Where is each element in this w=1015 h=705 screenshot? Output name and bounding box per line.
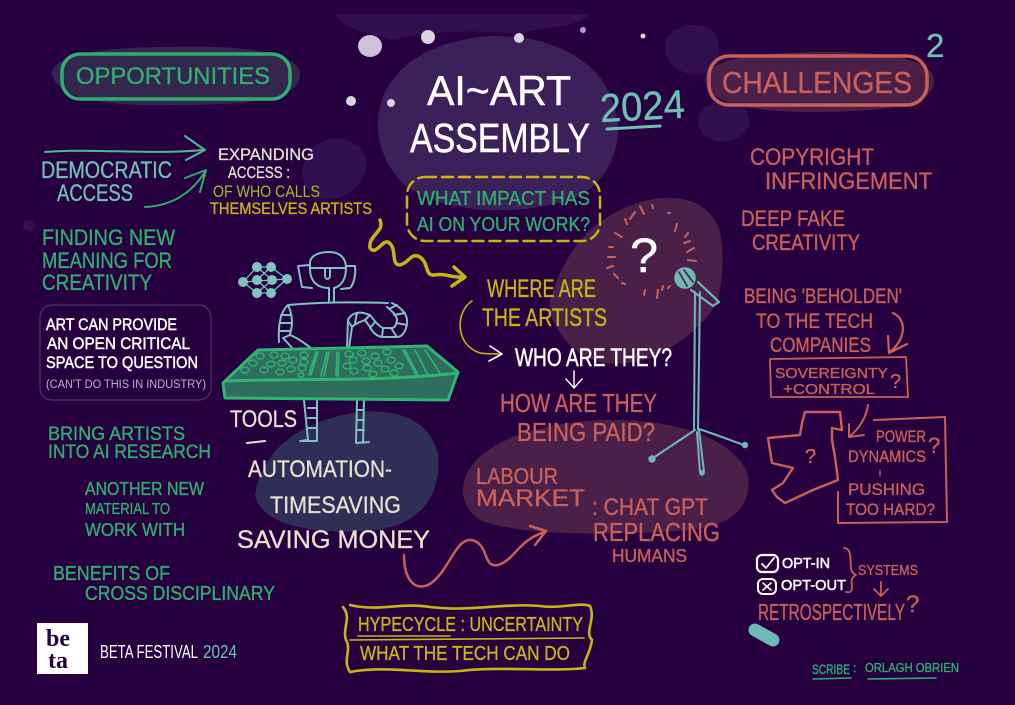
tools text: SAVING MONEY	[237, 526, 430, 554]
question callout	[407, 177, 600, 241]
finding new meaning: MEANING FOR	[42, 248, 172, 273]
panel: critical space: ART CAN PROVIDE	[46, 315, 177, 334]
scribe credit	[812, 660, 959, 679]
festival label: 2024	[203, 642, 237, 662]
icon: mixing desk	[223, 346, 458, 400]
paint splatter background	[23, 14, 749, 232]
arrow: top	[45, 136, 205, 160]
title: ASSEMBLY	[410, 115, 590, 161]
opt in opt out: OPT-OUT	[781, 577, 846, 594]
scribe credit: :	[853, 661, 856, 675]
another new material: ANOTHER NEW	[85, 479, 204, 499]
finding new meaning: FINDING NEW	[42, 225, 175, 250]
title: AI~ART	[427, 67, 571, 114]
deep fake	[741, 206, 860, 255]
chat gpt replacing humans: HUMANS	[612, 546, 687, 566]
question callout: AI ON YOUR WORK?	[417, 214, 590, 236]
benefits: BENEFITS OF	[53, 563, 170, 585]
finding new meaning	[42, 225, 175, 295]
tools text: AUTOMATION-	[248, 456, 392, 483]
icon: robot	[279, 252, 407, 443]
festival label: BETA FESTIVAL	[100, 642, 198, 662]
blob: labour market	[463, 420, 749, 534]
hypecycle callout	[343, 605, 592, 672]
blob: question bubble	[550, 198, 723, 364]
question mark and rays: ?	[630, 230, 658, 283]
chat gpt replacing humans	[592, 494, 720, 566]
where are the artists: THE ARTISTS	[482, 304, 607, 332]
question mark and rays	[607, 205, 696, 298]
scribe credit: SCRIBE	[812, 661, 850, 677]
how are they being paid: HOW ARE THEY	[500, 388, 657, 418]
opt in opt out	[757, 555, 846, 594]
challenges heading	[705, 52, 934, 112]
labour market: MARKET	[476, 485, 585, 512]
bring artists: BRING ARTISTS	[48, 424, 185, 445]
blob: tools	[255, 411, 438, 532]
hypecycle callout: HYPECYCLE : UNCERTAINTY	[358, 614, 583, 636]
democratic access: ACCESS	[57, 180, 133, 207]
another new material: MATERIAL TO	[85, 501, 170, 518]
where are the artists	[482, 275, 607, 332]
sovereignty box	[770, 357, 908, 398]
expanding access: ACCESS :	[228, 163, 290, 182]
expanding access: EXPANDING	[218, 145, 314, 164]
expanding access: OF WHO CALLS	[213, 182, 320, 201]
logo: ta	[48, 648, 68, 674]
being beholden	[744, 285, 902, 357]
being beholden: COMPANIES	[770, 334, 871, 357]
deep fake: DEEP FAKE	[741, 206, 845, 231]
copyright: INFRINGEMENT	[765, 168, 932, 195]
benefits	[53, 563, 275, 605]
retrospectively: ?	[906, 591, 919, 618]
expanding access	[210, 145, 372, 218]
down arrow	[566, 371, 582, 388]
opt in opt out: OPT-IN	[782, 555, 830, 572]
power dynamics box: ?	[928, 433, 940, 458]
finding new meaning: CREATIVITY	[42, 270, 152, 295]
another new material	[85, 479, 204, 540]
deep fake: CREATIVITY	[752, 230, 860, 255]
panel: critical space: (CAN'T DO THIS IN INDUSTRY)	[46, 379, 206, 391]
power dynamics box	[838, 417, 947, 523]
how are they being paid	[500, 388, 657, 447]
coral squiggle arrow	[404, 526, 546, 586]
year: 2024	[599, 83, 686, 131]
tools text: TOOLS	[230, 406, 297, 433]
scribe credit: ORLAGH OBRIEN	[865, 660, 959, 675]
tools text	[230, 406, 430, 554]
curved link	[460, 301, 500, 354]
page number: 2	[926, 27, 944, 64]
sovereignty box: +CONTROL	[783, 381, 875, 398]
labour market	[476, 463, 585, 512]
power dynamics box: DYNAMICS	[848, 447, 926, 466]
icon: neural network	[238, 262, 292, 298]
brace	[844, 548, 856, 592]
bring artists: INTO AI RESEARCH	[48, 442, 211, 463]
power dynamics box: PUSHING	[848, 480, 925, 499]
opportunities heading: OPPORTUNITIES	[76, 63, 270, 90]
panel: critical space: AN OPEN CRITICAL	[47, 334, 190, 353]
yellow squiggle arrow	[370, 220, 465, 286]
being beholden: BEING 'BEHOLDEN'	[744, 285, 902, 308]
arrow: to sovereignty	[888, 313, 907, 353]
teal marker stroke	[755, 630, 773, 640]
icon: map of ireland	[768, 412, 842, 503]
logo	[37, 623, 88, 674]
icon: microphone stand	[649, 268, 748, 475]
retrospectively: RETROSPECTIVELY	[758, 599, 905, 625]
logo: be	[46, 626, 70, 652]
opportunities heading	[52, 47, 300, 105]
expanding access: THEMSELVES ARTISTS	[210, 199, 372, 218]
down arrow	[874, 582, 888, 596]
chat gpt replacing humans: REPLACING	[593, 517, 720, 547]
icon: map of ireland: ?	[805, 446, 816, 468]
question callout: WHAT IMPACT HAS	[417, 188, 590, 210]
power dynamics box: TOO HARD?	[846, 500, 935, 519]
sovereignty box: ?	[890, 371, 901, 393]
another new material: WORK WITH	[85, 520, 185, 540]
bring artists	[48, 424, 211, 463]
tools text: TIMESAVING	[270, 492, 401, 519]
where are the artists: WHERE ARE	[487, 275, 596, 303]
panel: critical space	[40, 305, 211, 400]
labour market: LABOUR	[476, 463, 558, 489]
power dynamics box: POWER	[876, 427, 926, 446]
arrow: ireland to power	[849, 405, 868, 437]
arrow head	[489, 346, 502, 361]
title	[410, 67, 590, 161]
challenges heading: CHALLENGES	[722, 65, 912, 100]
democratic access: DEMOCRATIC	[41, 157, 172, 184]
systems: SYSTEMS	[858, 562, 918, 579]
hypecycle callout: WHAT THE TECH CAN DO	[360, 643, 570, 665]
copyright	[750, 144, 932, 195]
being beholden: TO THE TECH	[756, 310, 873, 333]
who are they: WHO ARE THEY?	[515, 344, 672, 372]
benefits: CROSS DISCIPLINARY	[85, 583, 275, 605]
sovereignty box: SOVEREIGNTY	[775, 365, 888, 382]
how are they being paid: BEING PAID?	[517, 417, 655, 447]
copyright: COPYRIGHT	[750, 144, 874, 171]
retrospectively	[758, 591, 919, 625]
panel: critical space: SPACE TO QUESTION	[46, 353, 198, 372]
arrow: bottom	[145, 170, 206, 207]
democratic access	[41, 157, 172, 207]
chat gpt replacing humans: : CHAT GPT	[592, 494, 708, 521]
